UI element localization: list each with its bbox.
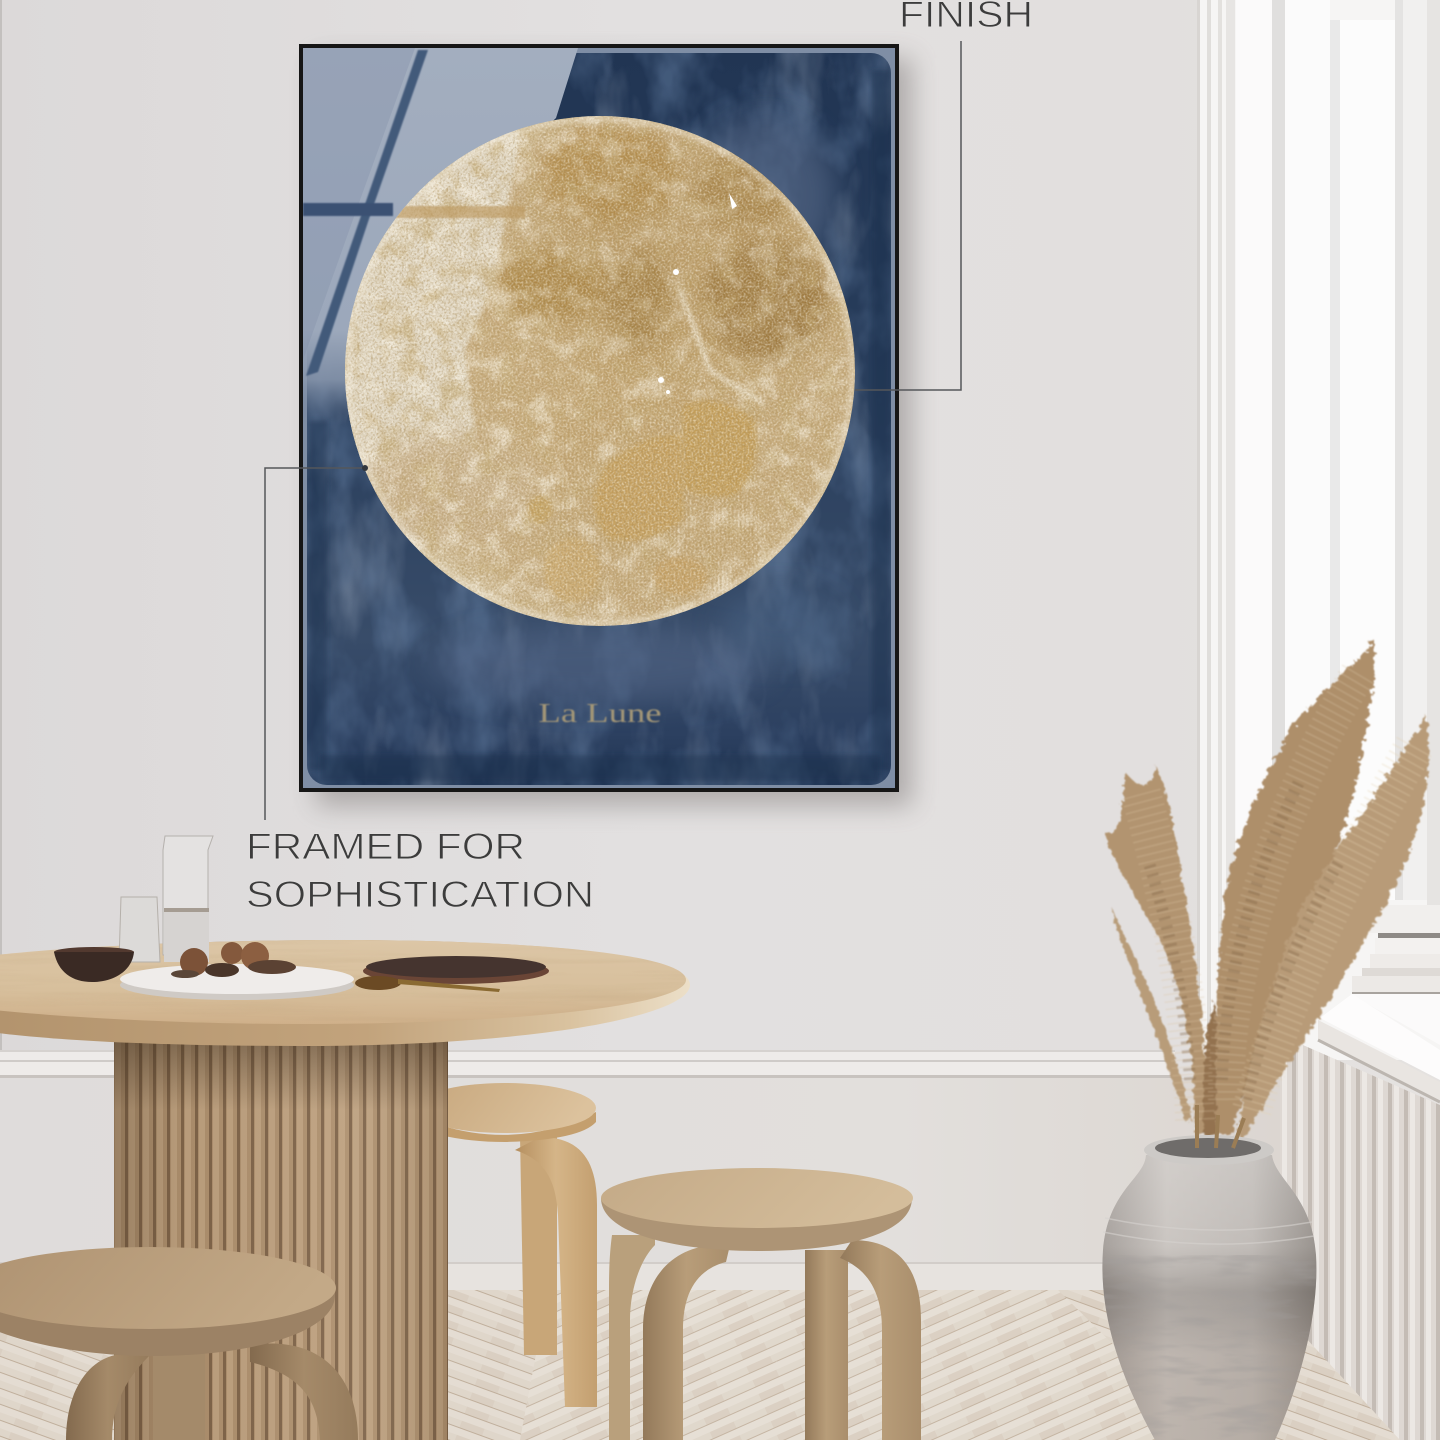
smooth lower maria — [528, 400, 760, 610]
front right stool — [601, 1168, 921, 1440]
icon: carafe — [163, 836, 213, 962]
table — [0, 940, 690, 1440]
nuts — [171, 942, 296, 978]
table top — [0, 940, 690, 1046]
framed art print — [299, 44, 912, 806]
callout: framed for sophistication: SOPHISTICATION — [246, 874, 594, 915]
pampas grass — [1105, 640, 1429, 1140]
moon — [300, 110, 855, 626]
icon: dark bowl — [54, 947, 134, 982]
stack of books on sill — [1352, 933, 1440, 994]
floor — [0, 1262, 1440, 1440]
frame shadow — [316, 58, 912, 806]
window frame and trim — [1197, 0, 1440, 1060]
window sill — [1318, 994, 1440, 1102]
callout leader: framed — [265, 468, 365, 820]
glass reflection — [303, 48, 578, 425]
artwork title: La Lune — [538, 698, 662, 728]
tableware — [54, 836, 549, 1000]
callout text: framed: FRAMED FOR — [246, 826, 525, 867]
callout: framed for sophistication — [246, 465, 594, 915]
bright rim — [348, 119, 852, 623]
wooden plate — [363, 956, 549, 984]
spoons — [355, 976, 500, 992]
callout leader: finish — [855, 41, 961, 390]
front left stool — [0, 1247, 358, 1440]
dark golden maria — [540, 125, 680, 225]
black frame — [299, 44, 899, 792]
ceramic vase — [1100, 1105, 1320, 1440]
reflected window bar — [395, 206, 525, 218]
icon: glass — [119, 897, 160, 962]
callout: finish — [855, 0, 1033, 390]
wainscot moulding — [0, 1050, 1175, 1078]
radiator — [1280, 1035, 1440, 1440]
pampas feather texture — [1140, 670, 1415, 1120]
fluted base — [114, 1030, 448, 1440]
light left highlands — [345, 128, 522, 546]
surface grain — [345, 116, 855, 626]
marble board — [120, 964, 354, 1000]
speckle layers — [345, 116, 855, 626]
back stool — [414, 1083, 597, 1407]
artwork — [303, 48, 895, 788]
